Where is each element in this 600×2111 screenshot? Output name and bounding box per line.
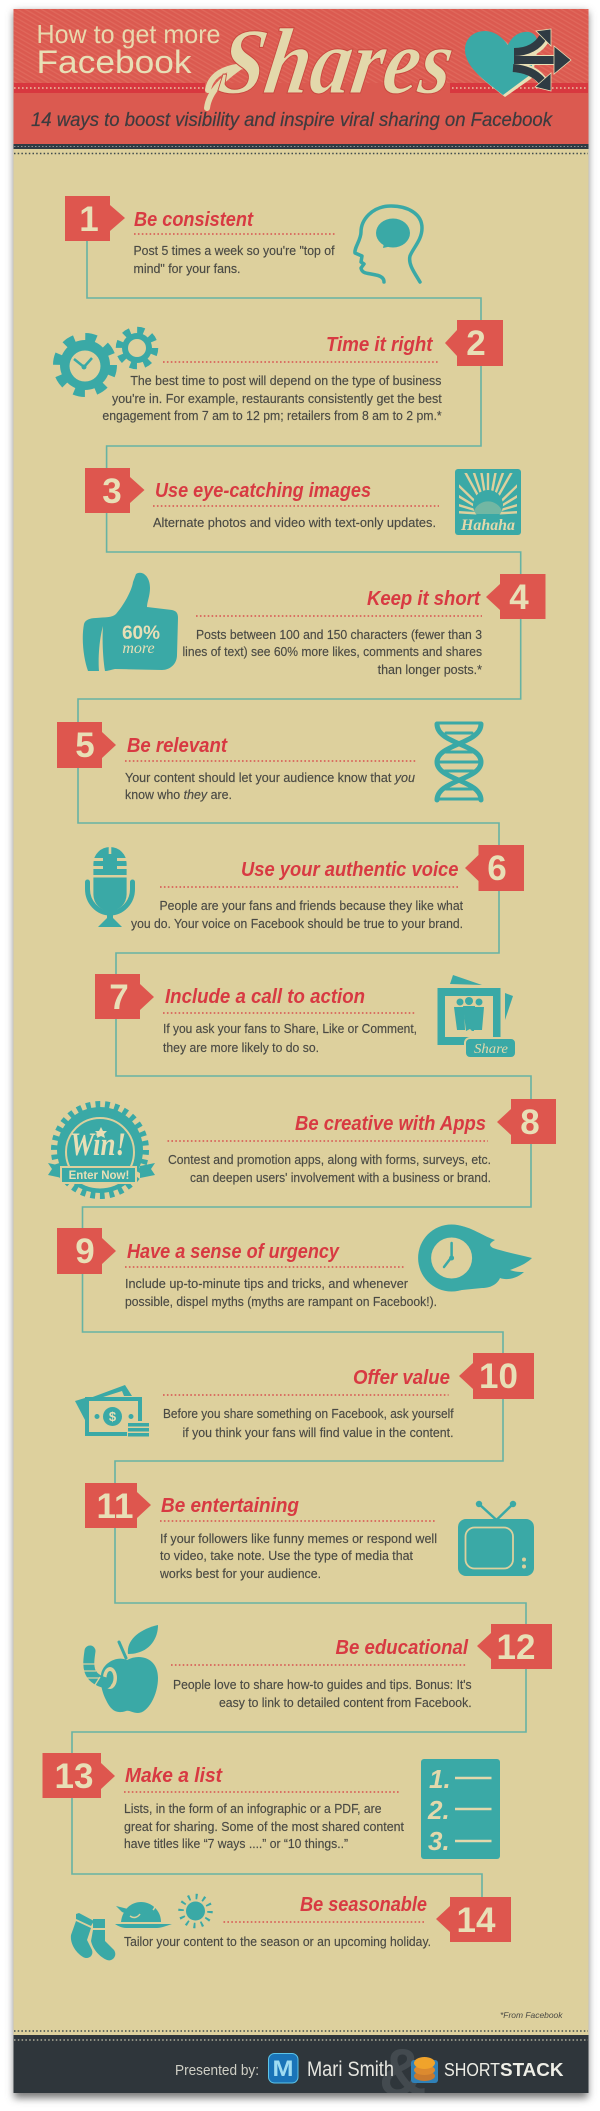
number badge 4: 4 — [509, 578, 529, 617]
text block: know who they are. — [125, 788, 232, 802]
number badge 13 — [42, 1753, 115, 1798]
text block — [131, 899, 463, 931]
icon: numbered list: 3. — [428, 1826, 450, 1856]
logo: shortstack — [411, 2057, 564, 2083]
number badge 1 — [65, 196, 125, 241]
presented by: Presented by: — [175, 2062, 259, 2079]
heading: Make a list — [125, 1765, 223, 1787]
icon: win badge: Win! — [70, 1127, 126, 1163]
number badge 8: 8 — [520, 1103, 540, 1142]
icon: cash and coins — [75, 1385, 150, 1438]
icon: cash and coins: $ — [109, 1409, 117, 1424]
number badge 6: 6 — [487, 849, 507, 888]
logo: mari smith: Mari Smith — [307, 2058, 394, 2081]
icon: clock gears — [57, 330, 155, 393]
footer bar — [14, 2030, 588, 2093]
connector path between tips — [72, 241, 531, 1897]
icon: thumbs up 60% more: more — [122, 640, 155, 657]
number badge 10 — [459, 1353, 534, 1399]
panel: tip 7 include a call to action — [95, 974, 516, 1058]
logo: shortstack: STACK — [500, 2060, 564, 2080]
number badge 3: 3 — [102, 472, 122, 511]
heading: Have a sense of urgency — [127, 1241, 340, 1263]
heading: Be educational — [336, 1637, 468, 1659]
icon: flying clock — [418, 1224, 532, 1292]
text block: works best for your audience. — [159, 1567, 321, 1581]
text block — [182, 628, 482, 677]
panel: tip 4 keep it short — [83, 573, 545, 677]
text block: you're in. For example, restaurants consistently get the best — [112, 392, 442, 406]
number badge 2 — [445, 320, 503, 366]
text block: If you ask your fans to Share, Like or Comment, — [163, 1022, 417, 1036]
text block: If your followers like funny memes or respond well — [160, 1532, 437, 1546]
icon: sunburst image: Hahaha — [460, 517, 515, 534]
text block — [173, 1678, 472, 1710]
text block: possible, dispel myths (myths are rampant on Facebook!). — [125, 1295, 437, 1309]
icon: numbered list: 1. — [429, 1764, 451, 1794]
text block: they are more likely to do so. — [163, 1041, 319, 1055]
icon: dna helix — [437, 723, 481, 800]
number badge 8 — [497, 1099, 556, 1144]
text block: than longer posts.* — [378, 663, 482, 677]
panel: tip 2 time it right — [57, 320, 503, 423]
text block: Contest and promotion apps, along with forms, surveys, etc. — [168, 1153, 491, 1167]
panel: tip 8 be creative with apps — [48, 1099, 556, 1195]
panel: tip 1 be consistent — [65, 196, 422, 282]
icon: thumbs up 60% more — [83, 573, 178, 671]
text block: People love to share how-to guides and tips. Bonus: It's — [173, 1678, 472, 1692]
text block: mind" for your fans. — [134, 262, 240, 276]
icon: win badge: Enter Now! — [69, 1170, 129, 1182]
icon: head with speech bubble — [355, 206, 422, 282]
panel: tip 12 be educational — [83, 1624, 552, 1713]
footnote: *From Facebook — [500, 2010, 563, 2020]
heading: Keep it short — [367, 588, 481, 610]
text block: lines of text) see 60% more likes, comments and shares — [182, 645, 482, 659]
text block: engagement from 7 am to 12 pm; retailers from 8 am to 2 pm.* — [102, 409, 442, 423]
text block: have titles like “7 ways ....” or “10 things..” — [124, 1837, 348, 1851]
heading: Be relevant — [127, 735, 228, 757]
heading: Be consistent — [134, 209, 254, 231]
panel: tip 14 be seasonable — [71, 1894, 511, 1960]
text block: can deepen users' involvement with a business or brand. — [190, 1171, 491, 1185]
number badge 10: 10 — [479, 1357, 518, 1396]
text block: Include up-to-minute tips and tricks, and whenever — [125, 1277, 408, 1291]
heading: Time it right — [326, 334, 434, 356]
number badge 12 — [477, 1624, 552, 1669]
panel: tip 11 be entertaining — [85, 1483, 534, 1581]
text block — [134, 244, 335, 276]
logo: mari smith — [268, 2054, 394, 2083]
number badge 2: 2 — [466, 324, 486, 363]
number badge 4 — [486, 574, 546, 619]
text block: to video, take note. Use the type of media that — [160, 1549, 413, 1563]
text block: easy to link to detailed content from Facebook. — [219, 1696, 472, 1710]
number badge 14: 14 — [457, 1901, 496, 1940]
title: facebook: Facebook — [36, 44, 193, 80]
number badge 6 — [465, 845, 524, 891]
text block: The best time to post will depend on the type of business — [130, 374, 441, 388]
heading: Use your authentic voice — [241, 859, 458, 881]
text block — [125, 771, 415, 802]
number badge 7: 7 — [109, 978, 129, 1017]
text block — [102, 374, 442, 423]
text block: Tailor your content to the season or an upcoming holiday. — [124, 1935, 431, 1949]
number badge 5 — [57, 722, 116, 768]
panel: tip 3 use eye-catching images — [85, 468, 521, 535]
panel: tip 13 make a list — [42, 1753, 500, 1859]
text block: Your content should let your audience know that you — [125, 771, 415, 785]
text block: if you think your fans will find value in the content. — [182, 1426, 454, 1440]
icon: roast turkey — [115, 1902, 172, 1928]
panel: tip 5 be relevant — [57, 722, 481, 802]
panel: tip 10 offer value — [75, 1353, 534, 1440]
heading: Offer value — [353, 1367, 450, 1389]
header banner — [14, 9, 588, 154]
icon: microphone — [88, 846, 132, 927]
heading: Be seasonable — [300, 1894, 427, 1916]
heading: Use eye-catching images — [155, 480, 371, 502]
panel: tip 9 have a sense of urgency — [57, 1224, 532, 1309]
logo: mari smith: M — [272, 2056, 294, 2081]
icon: heart with share arrows — [465, 29, 571, 97]
number badge 9 — [57, 1228, 116, 1274]
title: shares: Shares — [213, 11, 461, 114]
icon: numbered list: 2. — [427, 1795, 450, 1825]
logo: shortstack: SHORT — [444, 2060, 500, 2080]
text block — [163, 1022, 417, 1055]
text block: Post 5 times a week so you're "top of — [134, 244, 335, 258]
heading: Include a call to action — [165, 986, 365, 1008]
number badge 7 — [95, 974, 154, 1019]
icon: win badge — [48, 1105, 155, 1195]
number badge 13: 13 — [55, 1757, 93, 1796]
text block: Lists, in the form of an infographic or a PDF, are — [124, 1802, 382, 1816]
icon: apple with worm — [83, 1625, 158, 1713]
number badge 3 — [85, 468, 144, 513]
number badge 9: 9 — [75, 1232, 95, 1271]
number badge 11: 11 — [96, 1487, 134, 1526]
icon: share photo frame — [438, 975, 516, 1058]
panel: tip 6 use your authentic voice — [88, 845, 524, 931]
text block: Posts between 100 and 150 characters (fewer than 3 — [196, 628, 482, 642]
icon: share photo frame: Share — [474, 1042, 508, 1057]
text block: you do. Your voice on Facebook should be true to your brand. — [131, 917, 463, 931]
icon: socks — [71, 1913, 115, 1960]
ampersand watermark: & — [379, 2035, 427, 2109]
icon: television — [458, 1501, 534, 1576]
text block — [163, 1407, 454, 1440]
text block: Before you share something on Facebook, ask yourself — [163, 1407, 454, 1421]
text block: great for sharing. Some of the most shared content — [124, 1820, 404, 1834]
number badge 5: 5 — [75, 726, 95, 765]
icon: sunburst image — [455, 469, 521, 535]
text block — [168, 1153, 491, 1185]
text block — [125, 1277, 437, 1309]
number badge 1: 1 — [79, 200, 99, 239]
text block — [124, 1802, 404, 1851]
number badge 14 — [436, 1897, 511, 1942]
text block: People are your fans and friends because they like what — [160, 899, 463, 913]
heading: Be entertaining — [161, 1495, 299, 1517]
title: how to get more: How to get more — [36, 19, 220, 49]
heading: Be creative with Apps — [295, 1113, 486, 1135]
icon: numbered list — [421, 1759, 500, 1859]
text block: Alternate photos and video with text-only updates. — [153, 516, 436, 530]
icon: thumbs up 60% more: 60% — [122, 623, 160, 644]
icon: sun — [181, 1896, 210, 1926]
subtitle: 14 ways to boost visibility and inspire viral sharing on Facebook — [31, 109, 553, 131]
text block — [159, 1532, 437, 1581]
number badge 12: 12 — [497, 1628, 535, 1667]
number badge 11 — [85, 1483, 151, 1528]
